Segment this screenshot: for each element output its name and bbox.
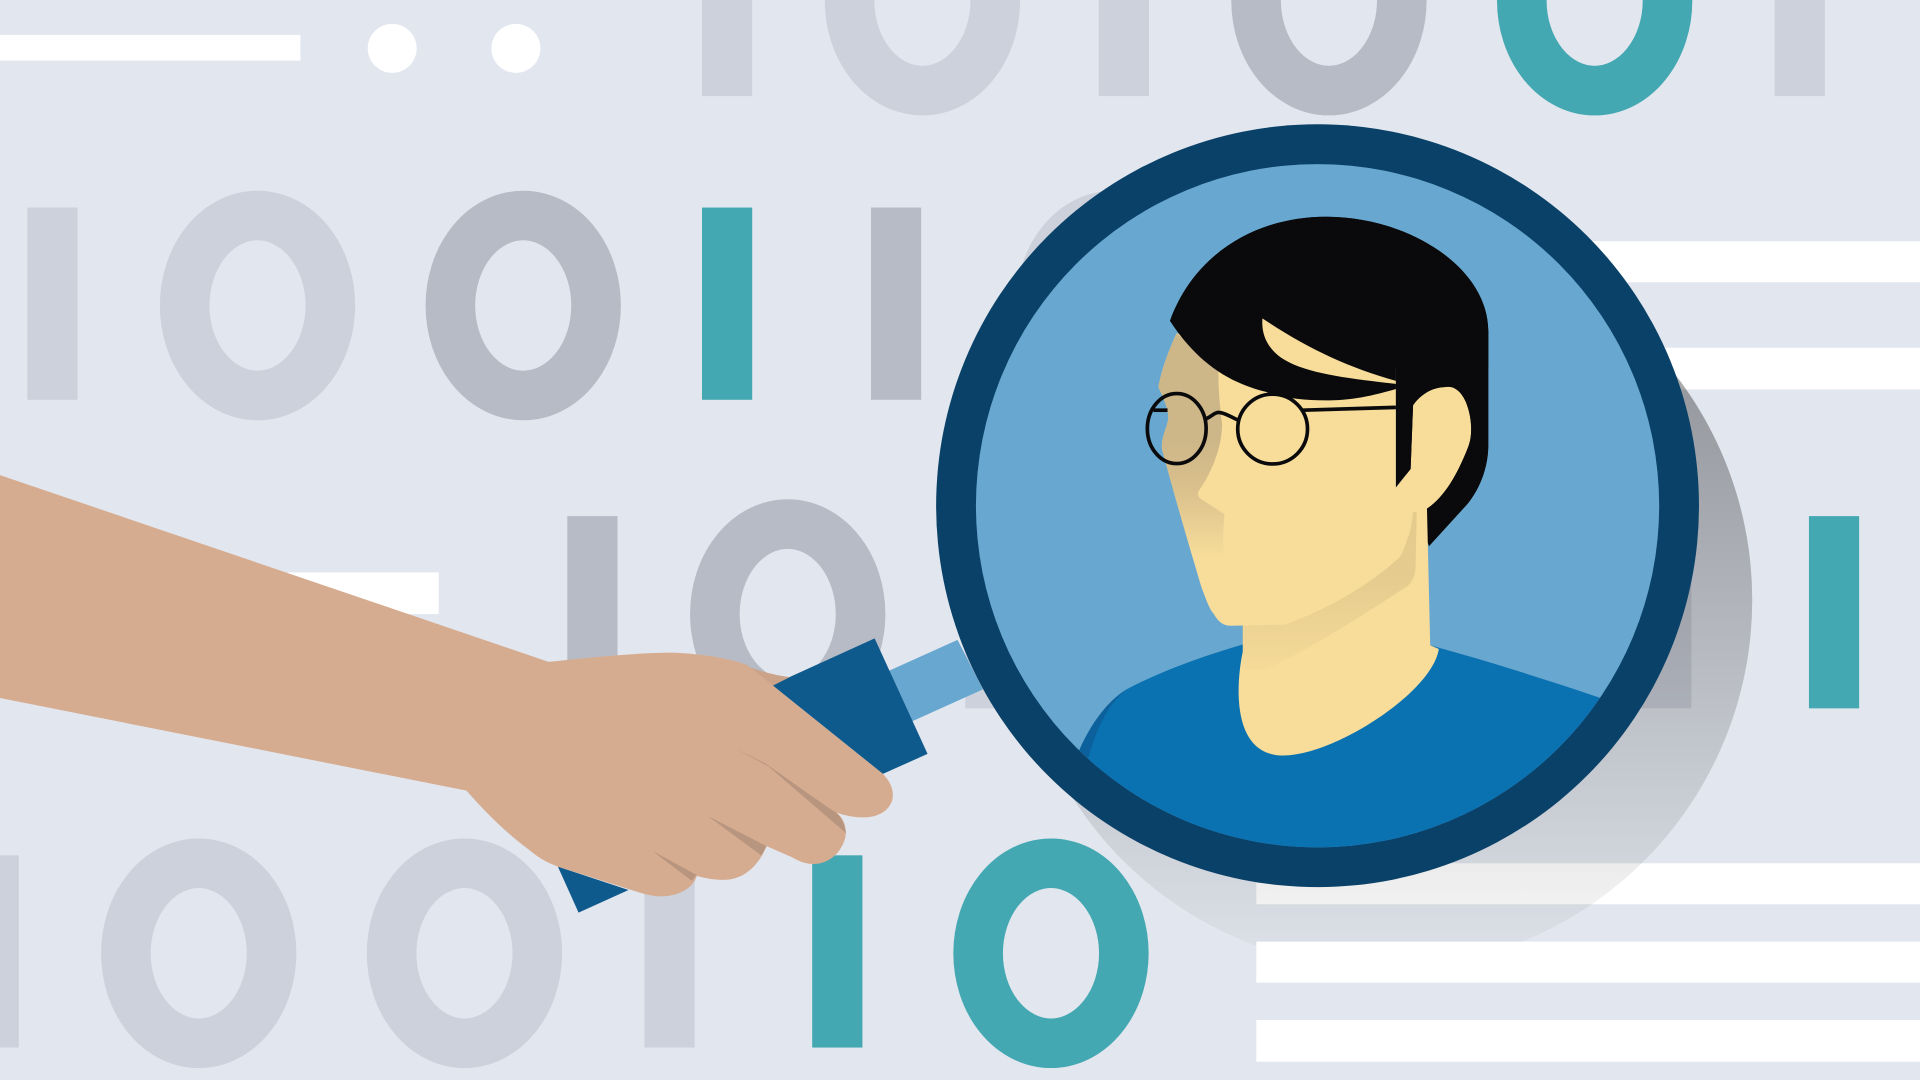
shirt: [1088, 644, 1600, 848]
hair front: [1170, 217, 1488, 400]
magnifier drop shadow: [1015, 231, 1752, 969]
binary pattern: third row: [288, 516, 1859, 708]
finger crease 2: [708, 816, 767, 856]
right lens: [1238, 394, 1308, 464]
portrait of man with glasses: [1079, 216, 1600, 848]
neck: [1239, 490, 1439, 756]
binary pattern: second row: [27, 208, 1186, 400]
magnifier handle grip: upper part: [772, 638, 928, 774]
hair back: [1170, 217, 1488, 546]
hand and arm: [0, 475, 893, 896]
magnifier rim: [936, 124, 1699, 887]
binary pattern: top row: [0, 0, 1825, 96]
white text-line bars above shadow: [1256, 942, 1920, 1062]
white text-line bars behind shadow: [1256, 241, 1920, 904]
glasses: [1147, 394, 1396, 464]
temple arm: [1303, 407, 1396, 410]
magnifier handle shaft: [856, 640, 983, 737]
binary pattern: bottom row: [0, 855, 862, 1048]
teal binary zero above shadow: [978, 863, 1124, 1043]
face shading: [1158, 333, 1224, 557]
shirt shadow sleeve: [1079, 690, 1126, 776]
magnifier handle grip: lower part: [558, 867, 629, 913]
far temple arm: [1153, 409, 1168, 412]
finger crease 1: [735, 748, 846, 833]
rear of hand behind grip: [747, 666, 790, 686]
finger crease 3: [653, 851, 696, 881]
sideburn and hair behind ear: [1396, 331, 1488, 546]
jaw and neck shading: [1242, 512, 1416, 653]
magnifier lens: [976, 164, 1659, 847]
bridge: [1206, 412, 1238, 420]
left lens: [1147, 394, 1206, 464]
face: [1158, 333, 1471, 626]
arm and fingers: [0, 475, 893, 896]
hair highlight slit: [1262, 318, 1396, 384]
